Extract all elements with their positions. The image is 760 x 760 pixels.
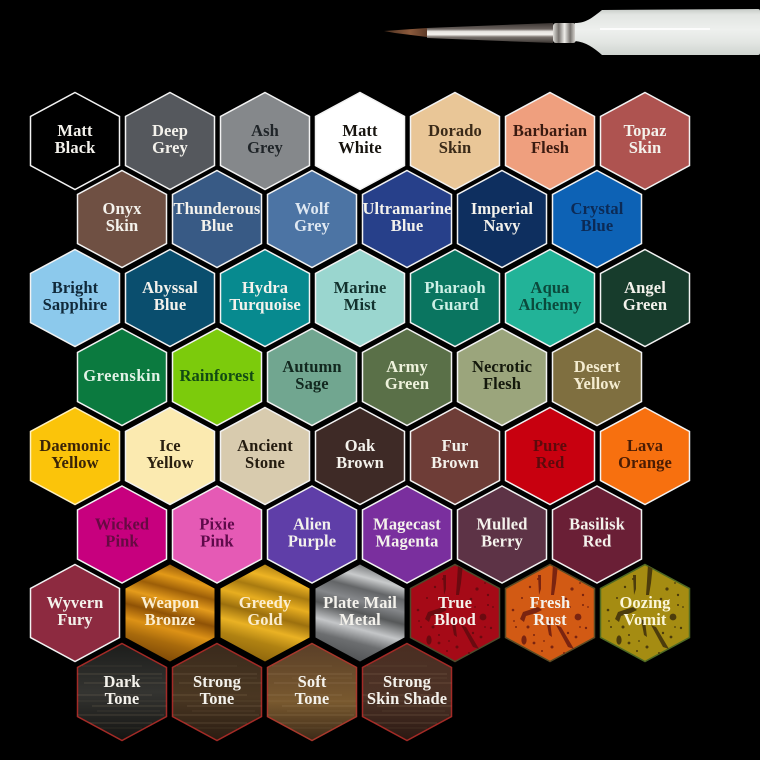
swatch: Matt Black: Black bbox=[55, 138, 96, 157]
swatch: Abyssal Blue: Blue bbox=[154, 295, 186, 314]
swatch: Pixie Pink: Pink bbox=[200, 532, 234, 550]
swatch: Army Green: Green bbox=[385, 374, 429, 393]
swatch: Army Green bbox=[362, 328, 452, 426]
swatch: Ancient Stone: Stone bbox=[245, 453, 285, 472]
swatch: Daemonic Yellow bbox=[30, 408, 120, 504]
swatch: Barbarian Flesh bbox=[506, 92, 594, 190]
swatch: Alien Purple: Alien bbox=[293, 514, 331, 534]
swatch: Pharaoh Guard: Guard bbox=[431, 295, 479, 314]
swatch: Imperial Navy bbox=[458, 170, 546, 268]
swatch: Pure Red bbox=[506, 408, 594, 504]
swatch: Greedy Gold: Gold bbox=[247, 610, 283, 629]
swatch: True Blood: Blood bbox=[434, 610, 476, 629]
swatch: Marine Mist: Mist bbox=[344, 295, 377, 314]
swatch: Hydra Turquoise: Hydra bbox=[242, 278, 288, 297]
swatch: Strong Tone: Strong bbox=[193, 672, 242, 691]
swatch: Magecast Magenta: Magecast bbox=[373, 514, 441, 534]
swatch: Dorado Skin: Skin bbox=[439, 138, 471, 157]
swatch: Bright Sapphire: Sapphire bbox=[43, 295, 107, 314]
swatch: Lava Orange: Lava bbox=[627, 436, 663, 455]
swatch: Matt White: Matt bbox=[342, 121, 378, 140]
swatch: Plate Mail Metal: Metal bbox=[339, 610, 381, 629]
swatch: Crystal Blue bbox=[552, 170, 642, 268]
swatch: Mulled Berry: Berry bbox=[481, 532, 524, 550]
swatch: Imperial Navy: Imperial bbox=[471, 199, 533, 218]
swatch: Hydra Turquoise bbox=[220, 250, 310, 346]
swatch: Necrotic Flesh bbox=[458, 328, 546, 426]
swatch: Oozing Vomit bbox=[600, 564, 690, 662]
swatch: Wolf Grey: Wolf bbox=[295, 199, 330, 218]
swatch: Basilisk Red bbox=[552, 486, 642, 583]
swatch: Dark Tone bbox=[77, 644, 167, 740]
swatch: Topaz Skin: Skin bbox=[629, 138, 661, 157]
swatch: Ultramarine Blue: Ultramarine bbox=[362, 199, 452, 218]
swatch: Alien Purple bbox=[268, 486, 356, 583]
swatch: Abyssal Blue: Abyssal bbox=[142, 278, 198, 297]
swatch: Strong Tone: Tone bbox=[200, 689, 234, 708]
swatch: Alien Purple: Purple bbox=[288, 532, 336, 550]
swatch: Barbarian Flesh: Flesh bbox=[531, 138, 569, 157]
swatch: Oozing Vomit: Oozing bbox=[619, 593, 671, 612]
swatch: Soft Tone bbox=[267, 644, 357, 740]
swatch: Pharaoh Guard: Pharaoh bbox=[424, 278, 486, 297]
swatch: Soft Tone: Tone bbox=[295, 689, 329, 708]
swatch: Onyx Skin: Skin bbox=[106, 216, 138, 235]
swatch: Wicked Pink: Pink bbox=[105, 532, 139, 550]
swatch: Ancient Stone: Ancient bbox=[237, 436, 293, 455]
swatch: Aqua Alchemy bbox=[506, 250, 594, 346]
swatch: Mulled Berry: Mulled bbox=[476, 514, 528, 534]
swatch: Greenskin: Greenskin bbox=[83, 366, 161, 385]
swatch: Pure Red: Pure bbox=[533, 436, 567, 455]
swatch: Matt White bbox=[316, 92, 404, 190]
swatch: Deep Grey: Grey bbox=[152, 138, 189, 157]
swatch: Fur Brown: Fur bbox=[442, 436, 468, 455]
swatch: Barbarian Flesh: Barbarian bbox=[513, 121, 587, 140]
swatch: Wolf Grey: Grey bbox=[294, 216, 331, 235]
swatch: Crystal Blue: Crystal bbox=[571, 199, 624, 218]
swatch: Army Green: Army bbox=[386, 357, 428, 376]
swatch: Marine Mist bbox=[316, 250, 404, 346]
swatch: Aqua Alchemy: Aqua bbox=[531, 278, 569, 297]
swatch: Ice Yellow: Ice bbox=[159, 436, 181, 455]
swatch: Matt Black bbox=[30, 92, 120, 190]
swatch: Angel Green bbox=[600, 250, 690, 346]
swatch: Weapon Bronze: Weapon bbox=[141, 593, 199, 612]
swatch: Abyssal Blue bbox=[126, 250, 214, 346]
swatch: Desert Yellow: Yellow bbox=[573, 374, 621, 393]
swatch: Wolf Grey bbox=[268, 170, 356, 268]
swatch: Dark Tone: Dark bbox=[103, 672, 141, 691]
swatch: Deep Grey: Deep bbox=[152, 121, 188, 140]
swatch: Fresh Rust: Fresh bbox=[530, 593, 570, 612]
swatch: Ice Yellow: Yellow bbox=[146, 453, 194, 472]
swatch: Ancient Stone bbox=[220, 408, 310, 504]
swatch: Necrotic Flesh: Necrotic bbox=[472, 357, 532, 376]
swatch: Matt Black: Matt bbox=[57, 121, 93, 140]
swatch: Basilisk Red: Basilisk bbox=[569, 514, 626, 534]
swatch: Onyx Skin bbox=[78, 170, 166, 268]
swatch: Ash Grey bbox=[220, 92, 310, 190]
swatch: Bright Sapphire: Bright bbox=[52, 278, 99, 297]
swatch: Daemonic Yellow: Daemonic bbox=[39, 436, 111, 455]
swatch: Weapon Bronze: Bronze bbox=[145, 610, 195, 629]
swatch: Ultramarine Blue: Blue bbox=[391, 216, 423, 235]
swatch: Soft Tone: Soft bbox=[298, 672, 327, 691]
swatch: Greenskin bbox=[78, 328, 166, 426]
swatch: Fur Brown bbox=[410, 408, 500, 504]
swatch: Greedy Gold bbox=[220, 564, 310, 662]
swatch: Marine Mist: Marine bbox=[334, 278, 386, 297]
swatch: Autumn Sage: Sage bbox=[295, 374, 329, 393]
swatch: Fresh Rust: Rust bbox=[533, 610, 567, 629]
swatch: Pixie Pink: Pixie bbox=[199, 514, 235, 534]
swatch: Aqua Alchemy: Alchemy bbox=[518, 295, 582, 314]
swatch: Dark Tone: Tone bbox=[105, 689, 139, 708]
swatch: Mulled Berry bbox=[458, 486, 546, 583]
swatch: Desert Yellow bbox=[552, 328, 642, 426]
swatch: Weapon Bronze bbox=[126, 564, 214, 662]
swatch: Onyx Skin: Onyx bbox=[103, 199, 142, 218]
swatch: Strong Tone bbox=[172, 644, 262, 740]
swatch: Pixie Pink bbox=[172, 486, 262, 583]
swatch: Fresh Rust bbox=[506, 564, 594, 662]
swatch: Oak Brown bbox=[316, 408, 404, 504]
swatch: True Blood: True bbox=[438, 593, 472, 612]
swatch: Strong Skin Shade: Strong bbox=[383, 672, 432, 691]
swatch: Wicked Pink bbox=[78, 486, 166, 583]
swatch: Rainforest: Rainforest bbox=[180, 366, 255, 385]
swatch: Thunderous Blue: Blue bbox=[201, 216, 233, 235]
swatch: Ice Yellow bbox=[126, 408, 214, 504]
swatch: Pharaoh Guard bbox=[410, 250, 500, 346]
swatch: Lava Orange: Orange bbox=[618, 453, 672, 472]
swatch: Hydra Turquoise: Turquoise bbox=[229, 295, 301, 314]
swatch: Magecast Magenta bbox=[362, 486, 452, 583]
swatch: Angel Green: Green bbox=[623, 295, 667, 314]
swatch: Oak Brown: Brown bbox=[336, 453, 384, 472]
swatch: Angel Green: Angel bbox=[624, 278, 666, 297]
paintbrush illustration bbox=[384, 9, 760, 55]
swatch: Desert Yellow: Desert bbox=[574, 357, 621, 376]
swatch: Basilisk Red: Red bbox=[583, 532, 611, 550]
swatch: True Blood bbox=[410, 564, 500, 662]
swatch: Imperial Navy: Navy bbox=[483, 216, 521, 235]
swatch: Wicked Pink: Wicked bbox=[95, 514, 149, 534]
swatch: Plate Mail Metal: Plate Mail bbox=[323, 593, 397, 612]
swatch: Ash Grey: Grey bbox=[247, 138, 284, 157]
swatch: Deep Grey bbox=[126, 92, 214, 190]
swatch: Matt White: White bbox=[338, 138, 382, 157]
swatch: Crystal Blue: Blue bbox=[581, 216, 613, 235]
swatch: Pure Red: Red bbox=[536, 453, 564, 472]
swatch: Thunderous Blue: Thunderous bbox=[174, 199, 261, 218]
swatch: Wyvern Fury bbox=[30, 564, 120, 662]
swatch: Lava Orange bbox=[600, 408, 690, 504]
swatch: Plate Mail Metal bbox=[316, 564, 404, 662]
swatch: Magecast Magenta: Magenta bbox=[375, 532, 439, 550]
swatch: Daemonic Yellow: Yellow bbox=[51, 453, 99, 472]
swatch: Strong Skin Shade: Skin Shade bbox=[367, 689, 447, 708]
swatch: Oak Brown: Oak bbox=[345, 436, 376, 455]
swatch: Necrotic Flesh: Flesh bbox=[483, 374, 521, 393]
swatch: Ultramarine Blue bbox=[362, 170, 452, 268]
swatch: Wyvern Fury: Fury bbox=[57, 610, 93, 629]
swatch: Dorado Skin: Dorado bbox=[428, 121, 482, 140]
swatch: Oozing Vomit: Vomit bbox=[624, 610, 667, 629]
swatch: Autumn Sage bbox=[268, 328, 356, 426]
swatch: Strong Skin Shade bbox=[362, 644, 452, 740]
swatch: Greedy Gold: Greedy bbox=[239, 593, 292, 612]
swatch: Bright Sapphire bbox=[30, 250, 120, 346]
swatch: Topaz Skin bbox=[600, 92, 690, 190]
swatch: Thunderous Blue bbox=[172, 170, 262, 268]
swatch: Fur Brown: Brown bbox=[431, 453, 479, 472]
swatch: Dorado Skin bbox=[410, 92, 500, 190]
swatch: Autumn Sage: Autumn bbox=[282, 357, 342, 376]
swatch: Rainforest bbox=[172, 328, 262, 426]
swatch: Wyvern Fury: Wyvern bbox=[47, 593, 103, 612]
swatch: Ash Grey: Ash bbox=[251, 121, 279, 140]
swatch: Topaz Skin: Topaz bbox=[624, 121, 666, 140]
